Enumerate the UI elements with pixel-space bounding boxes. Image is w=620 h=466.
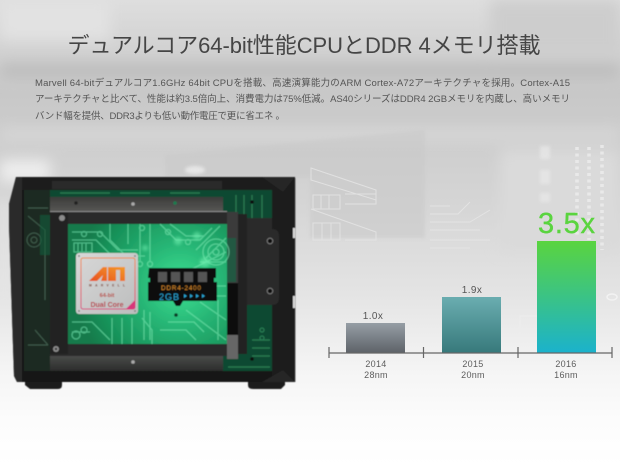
icon: Marvell dual-core chip — [76, 253, 138, 314]
icon: DDR4 memory module — [148, 268, 217, 306]
right side shell — [272, 190, 295, 382]
axis labels: 20nm — [461, 370, 485, 380]
axis labels: 2014 — [365, 359, 387, 369]
axis labels — [364, 359, 578, 380]
drive tray top and bottom strips — [50, 197, 223, 211]
NAS device — [9, 177, 295, 389]
right-side bracket — [247, 218, 279, 305]
axis labels: 2016 — [555, 359, 577, 369]
tray side rail — [227, 212, 238, 358]
icon: Marvell dual-core chip: 64-bit — [100, 293, 115, 299]
axis labels: 28nm — [364, 370, 388, 380]
bottom shell band — [22, 371, 295, 382]
description text: Marvell 64-bitデュアルコア1.6GHz 64bit CPUを搭載、高速演算能力のARM Cortex-A72アーキテクチャを採用。Cortex-A15 — [35, 77, 570, 89]
drive bay frame — [50, 211, 227, 356]
bar 2016: 3.5x — [538, 208, 596, 240]
description text — [35, 77, 570, 122]
green circuit board, left and top dim area — [24, 190, 272, 374]
bar 2015 — [442, 285, 501, 353]
bar 2014 — [346, 311, 405, 353]
axis labels: 2015 — [462, 359, 484, 369]
axis — [329, 347, 612, 358]
axis labels: 16nm — [554, 370, 578, 380]
device shell — [9, 177, 295, 382]
bar 2015: 1.9x — [462, 285, 482, 296]
description text: アーキテクチャと比べて、性能は約3.5倍向上、消費電力は75%低減。AS40シリーズはDDR4 2GBメモリを内蔵し、高いメモリ — [35, 93, 570, 105]
device feet — [25, 380, 285, 389]
glowing circuit board window — [68, 224, 229, 344]
title: デュアルコア64-bit性能CPUとDDR 4メモリ搭載 — [68, 33, 540, 58]
icon: Marvell dual-core chip: Dual Core — [90, 302, 124, 309]
icon: DDR4 memory module: 2GB — [159, 292, 179, 302]
icon: DDR4 memory module: DDR4-2400 — [161, 285, 201, 292]
Marvell logo mark — [89, 267, 125, 281]
bar 2014: 1.0x — [363, 311, 383, 322]
icon: Marvell dual-core chip: MARVELL — [89, 284, 125, 288]
top shell band — [22, 177, 295, 190]
bar chart: CPU performance — [329, 208, 612, 380]
description text: バンド幅を提供、DDR3よりも低い動作電圧で更に省エネ 。 — [35, 110, 285, 122]
bar 2016 — [537, 208, 596, 353]
